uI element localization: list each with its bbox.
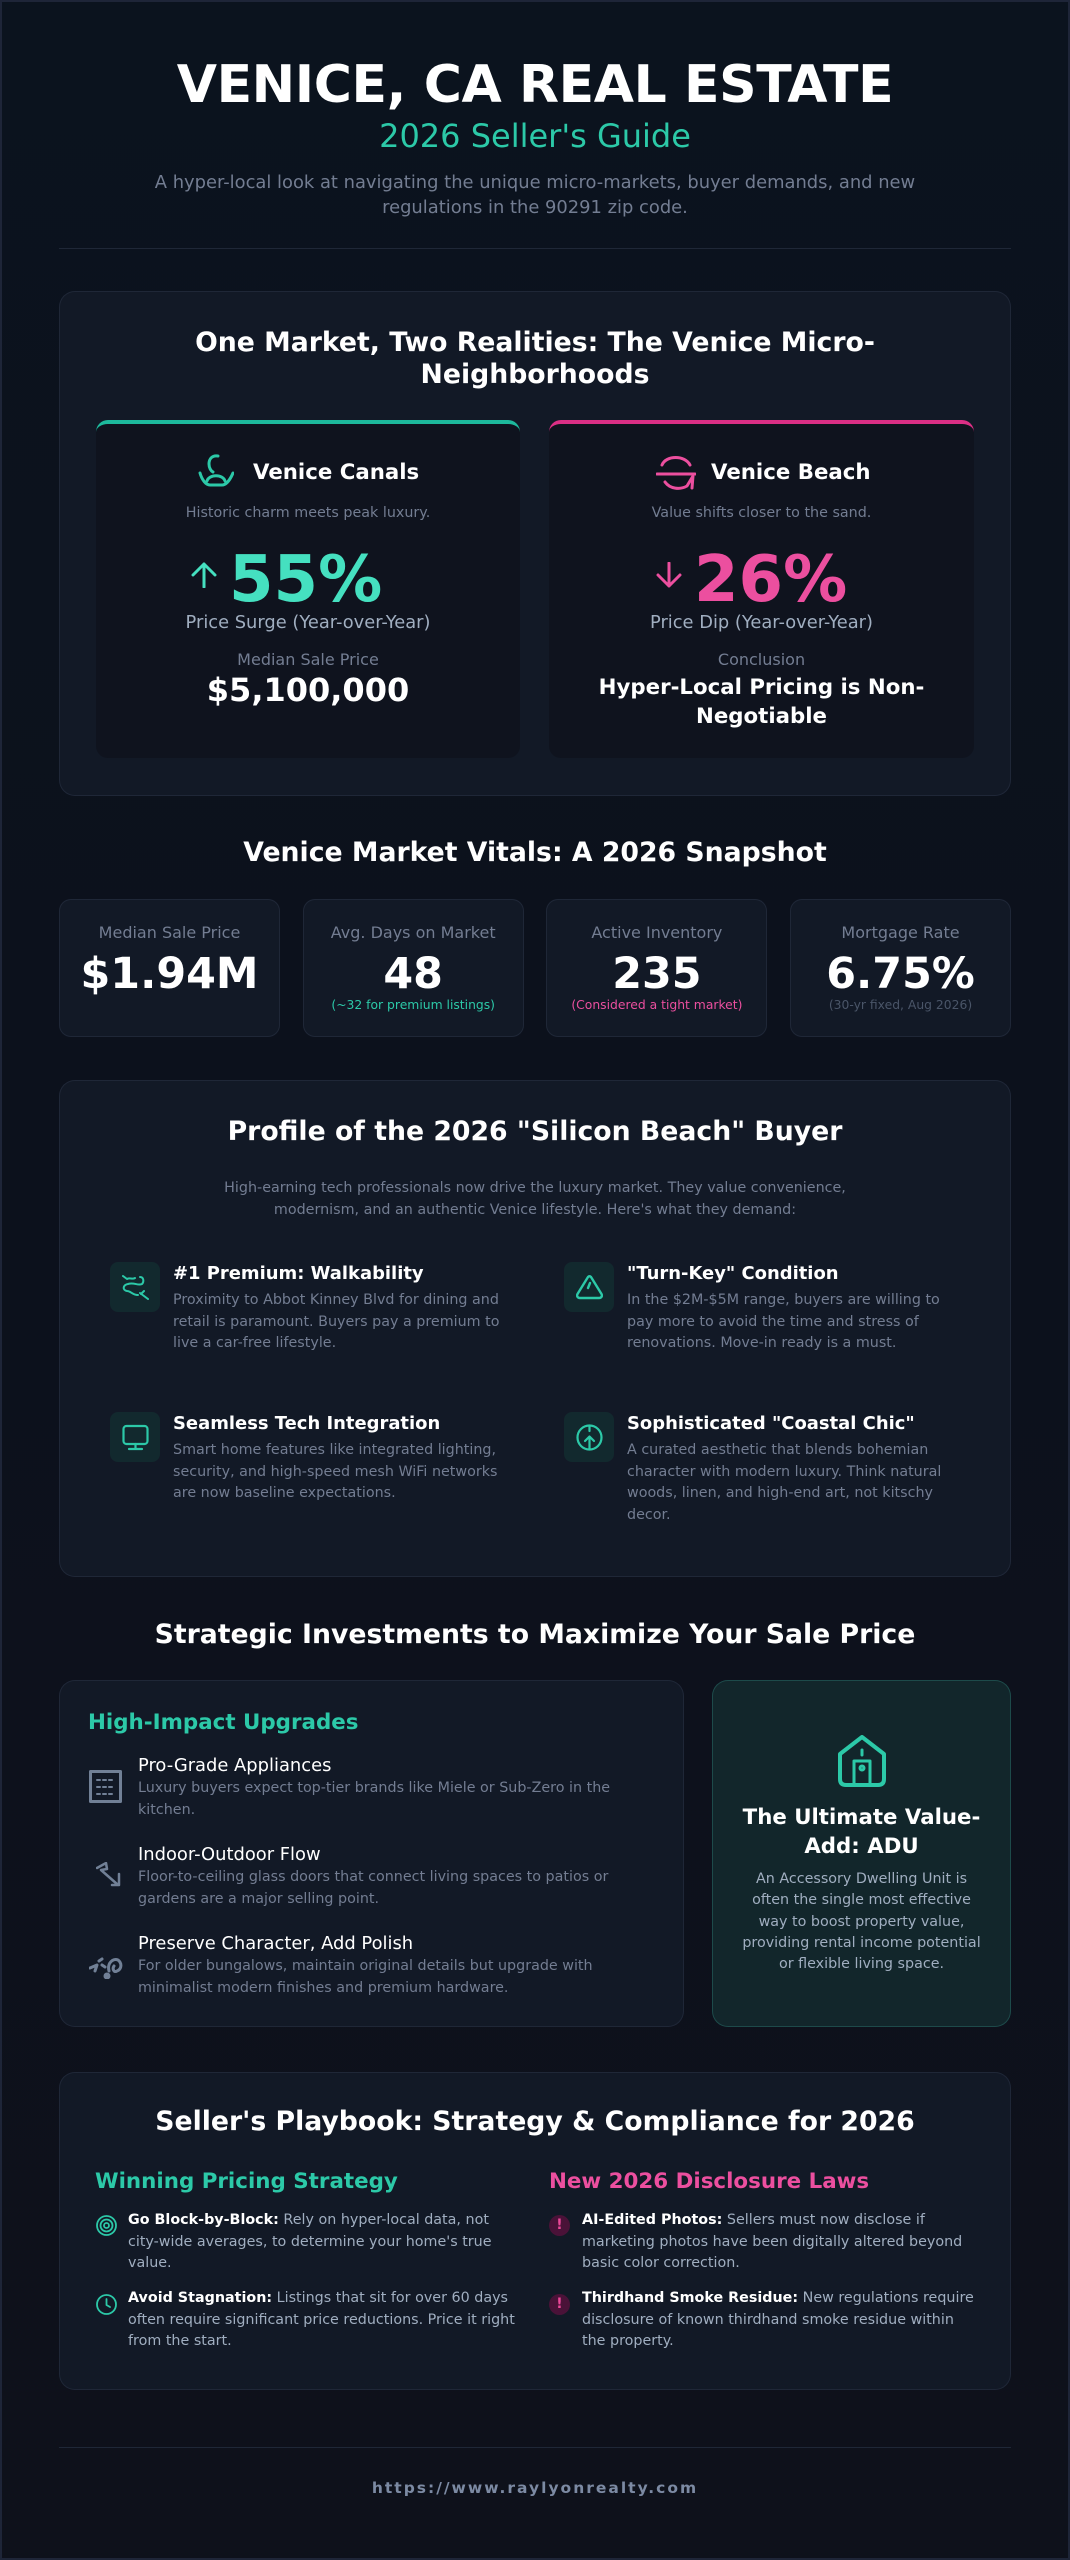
- ADU description: [742, 1871, 981, 1972]
- icon: alert: [549, 2294, 570, 2315]
- icon: alert: [549, 2215, 570, 2236]
- item: AI photos: AI-Edited Photos: Sellers must now disclose if: [582, 2212, 925, 2228]
- item: appliances: Luxury buyers expect top-tier brands like Miele or Sub-Zero in the: [138, 1780, 610, 1796]
- ADU description: providing rental income potential: [742, 1935, 981, 1951]
- stat label: Price Dip (Year-over-Year): [650, 612, 873, 633]
- stat: 26%: 26%: [694, 543, 847, 617]
- stat card: days on market: Avg. Days on Market: [331, 923, 496, 942]
- heading: Seller's Playbook: Strategy & Compliance for 2026: [155, 2106, 915, 2137]
- icon: clock: [96, 2294, 117, 2315]
- stat label: Price Surge (Year-over-Year): [186, 612, 430, 633]
- item: coastal chic: decor.: [627, 1506, 671, 1522]
- header: [155, 55, 915, 218]
- icon: canals: [198, 454, 234, 486]
- panel: buyer profile: [59, 1080, 1011, 1577]
- stat card: median sale price: [59, 899, 280, 1037]
- item: walkability: [110, 1262, 500, 1351]
- item: smoke residue: disclosure of known thirdhand smoke residue within: [582, 2312, 954, 2328]
- heading: One Market, Two Realities: The Venice Micro-: [195, 327, 875, 358]
- stat card: days on market: 48: [383, 949, 443, 999]
- item: walkability: live a car-free lifestyle.: [173, 1335, 336, 1351]
- icon: flow: [96, 1862, 120, 1886]
- stat card: mortgage rate: [790, 899, 1011, 1037]
- item: avoid stagnation: often require significant price reductions. Price it right: [128, 2312, 515, 2328]
- stat card: mortgage rate: Mortgage Rate: [841, 923, 960, 942]
- item: coastal chic: character with modern luxury. Think natural: [627, 1464, 941, 1480]
- tagline: Historic charm meets peak luxury.: [186, 505, 430, 521]
- icon: alert: !: [556, 2296, 563, 2312]
- subheading: disclosure: New 2026 Disclosure Laws: [549, 2169, 869, 2194]
- intro text: [155, 172, 915, 218]
- icon: monitor: [110, 1412, 160, 1462]
- item: block-by-block: city-wide averages, to determine your home's true: [128, 2234, 492, 2250]
- icon: circle arrow: [564, 1412, 614, 1462]
- item: indoor-outdoor: Indoor-Outdoor Flow: [138, 1844, 321, 1865]
- item: AI photos: marketing photos have been digitally altered beyond: [582, 2234, 962, 2250]
- item: tech integration: Smart home features like integrated lighting,: [173, 1442, 496, 1458]
- item: turn-key: [564, 1262, 940, 1351]
- tagline: Value shifts closer to the sand.: [652, 505, 871, 521]
- stat card: inventory: Active Inventory: [591, 923, 722, 942]
- icon: walkability: [110, 1262, 160, 1312]
- stat card: days on market: [303, 899, 524, 1037]
- neighborhood name: Venice Canals: [253, 460, 419, 485]
- item: smoke residue: Thirdhand Smoke Residue: New regulations require: [582, 2290, 974, 2306]
- item: block-by-block: [96, 2212, 492, 2271]
- item: tech integration: Seamless Tech Integration: [173, 1413, 440, 1434]
- panel: upgrades: [59, 1680, 684, 2027]
- heading: market vitals: Venice Market Vitals: A 2026 Snapshot: [243, 837, 827, 868]
- heading: [195, 327, 875, 390]
- item: AI photos: basic color correction.: [582, 2255, 740, 2271]
- icon: appliance: [89, 1770, 122, 1803]
- heading: Profile of the 2026 "Silicon Beach" Buyer: [228, 1116, 842, 1147]
- ADU title: The Ultimate Value-: [743, 1805, 980, 1830]
- item: walkability: Proximity to Abbot Kinney Blvd for dining and: [173, 1292, 499, 1308]
- card: Venice Beach: [549, 420, 974, 758]
- item: coastal chic: woods, linen, and high-end art, not kitschy: [627, 1485, 933, 1501]
- item: turn-key: pay more to avoid the time and stress of: [627, 1314, 919, 1330]
- item: smoke residue: [549, 2290, 974, 2349]
- item: coastal chic: Sophisticated "Coastal Chic": [627, 1413, 915, 1434]
- stats row: [59, 899, 1011, 1037]
- ADU description: way to boost property value,: [759, 1914, 964, 1930]
- intro: [224, 1180, 846, 1218]
- item: AI photos: [549, 2212, 962, 2271]
- subtitle: 2026 Seller's Guide: [379, 117, 691, 155]
- stat card: median sale price: Median Sale Price: [99, 923, 240, 942]
- stat card: mortgage rate: 6.75%: [826, 949, 975, 999]
- icon: warning triangle: [564, 1262, 614, 1312]
- intro text: A hyper-local look at navigating the unique micro-markets, buyer demands, and new: [155, 172, 915, 193]
- intro: High-earning tech professionals now drive the luxury market. They value convenience,: [224, 1180, 846, 1196]
- ADU description: or flexible living space.: [779, 1956, 944, 1972]
- item: indoor-outdoor: [96, 1844, 608, 1906]
- subheading: High-Impact Upgrades: [88, 1710, 359, 1735]
- median label: Median Sale Price: [237, 650, 379, 669]
- item: avoid stagnation: [96, 2290, 515, 2349]
- title: VENICE, CA REAL ESTATE: [177, 55, 893, 115]
- footer url: https://www.raylyonrealty.com: [372, 2479, 698, 2497]
- stat: 55%: 55%: [229, 543, 382, 617]
- item: appliances: Pro-Grade Appliances: [138, 1755, 331, 1776]
- panel: micro-neighborhoods: [59, 291, 1011, 796]
- panel: playbook: [59, 2072, 1011, 2390]
- subheading: pricing: Winning Pricing Strategy: [95, 2169, 398, 2194]
- item: avoid stagnation: Avoid Stagnation: Listings that sit for over 60 days: [128, 2290, 508, 2306]
- item: turn-key: renovations. Move-in ready is a must.: [627, 1335, 896, 1351]
- intro text: regulations in the 90291 zip code.: [382, 197, 688, 218]
- ADU title: [742, 1805, 980, 1859]
- item: appliances: kitchen.: [138, 1802, 195, 1818]
- stat card: inventory: (Considered a tight market): [571, 998, 742, 1012]
- item: coastal chic: [564, 1412, 941, 1522]
- conclusion text: Hyper-Local Pricing is Non-: [599, 675, 924, 700]
- item: walkability: #1 Premium: Walkability: [173, 1263, 424, 1284]
- median price: $5,100,000: [207, 671, 409, 709]
- intro: modernism, and an authentic Venice lifestyle. Here's what they demand:: [274, 1202, 796, 1218]
- item: walkability: retail is paramount. Buyers pay a premium to: [173, 1314, 500, 1330]
- icon: beach: [656, 456, 696, 490]
- item: block-by-block: Go Block-by-Block: Rely on hyper-local data, not: [128, 2212, 489, 2228]
- conclusion text: [599, 675, 924, 729]
- item: smoke residue: the property.: [582, 2333, 674, 2349]
- item: character: minimalist modern finishes and premium hardware.: [138, 1980, 508, 1996]
- item: appliances: [89, 1755, 610, 1818]
- icon: house: [838, 1735, 886, 1787]
- ADU description: An Accessory Dwelling Unit is: [756, 1871, 967, 1887]
- item: indoor-outdoor: gardens are a major selling point.: [138, 1890, 379, 1906]
- stat card: days on market: (~32 for premium listings): [331, 998, 495, 1012]
- item: tech integration: [110, 1412, 497, 1501]
- ADU description: often the single most effective: [752, 1892, 971, 1908]
- item: avoid stagnation: from the start.: [128, 2333, 232, 2349]
- stat card: mortgage rate: (30-yr fixed, Aug 2026): [829, 998, 972, 1012]
- heading: strategic investments: Strategic Investments to Maximize Your Sale Price: [155, 1619, 915, 1650]
- icon: target: [96, 2215, 117, 2236]
- conclusion label: Conclusion: [718, 650, 805, 669]
- item: character: [89, 1933, 593, 1996]
- item: block-by-block: value.: [128, 2255, 172, 2271]
- neighborhood name: Venice Beach: [711, 460, 871, 485]
- stat card: inventory: 235: [612, 949, 702, 999]
- card: Venice Canals: [96, 420, 520, 758]
- panel: ADU: [712, 1680, 1011, 2027]
- item: character: For older bungalows, maintain original details but upgrade with: [138, 1958, 593, 1974]
- icon: up arrow: [191, 562, 217, 588]
- item: character: Preserve Character, Add Polish: [138, 1933, 413, 1954]
- item: tech integration: security, and high-speed mesh WiFi networks: [173, 1464, 497, 1480]
- icon: down arrow: [656, 562, 682, 588]
- ADU title: Add: ADU: [804, 1834, 919, 1859]
- icon: alert: !: [556, 2217, 563, 2233]
- heading: Neighborhoods: [421, 359, 649, 390]
- item: indoor-outdoor: Floor-to-ceiling glass doors that connect living spaces to patios or: [138, 1869, 608, 1885]
- stat card: inventory: [546, 899, 767, 1037]
- item: tech integration: are now baseline expectations.: [173, 1485, 396, 1501]
- item: coastal chic: A curated aesthetic that blends bohemian: [627, 1442, 928, 1458]
- conclusion text: Negotiable: [696, 704, 827, 729]
- item: turn-key: "Turn-Key" Condition: [627, 1263, 839, 1284]
- stat card: median sale price: $1.94M: [81, 949, 258, 999]
- icon: tools: [89, 1957, 122, 1979]
- item: turn-key: In the $2M-$5M range, buyers are willing to: [627, 1292, 940, 1308]
